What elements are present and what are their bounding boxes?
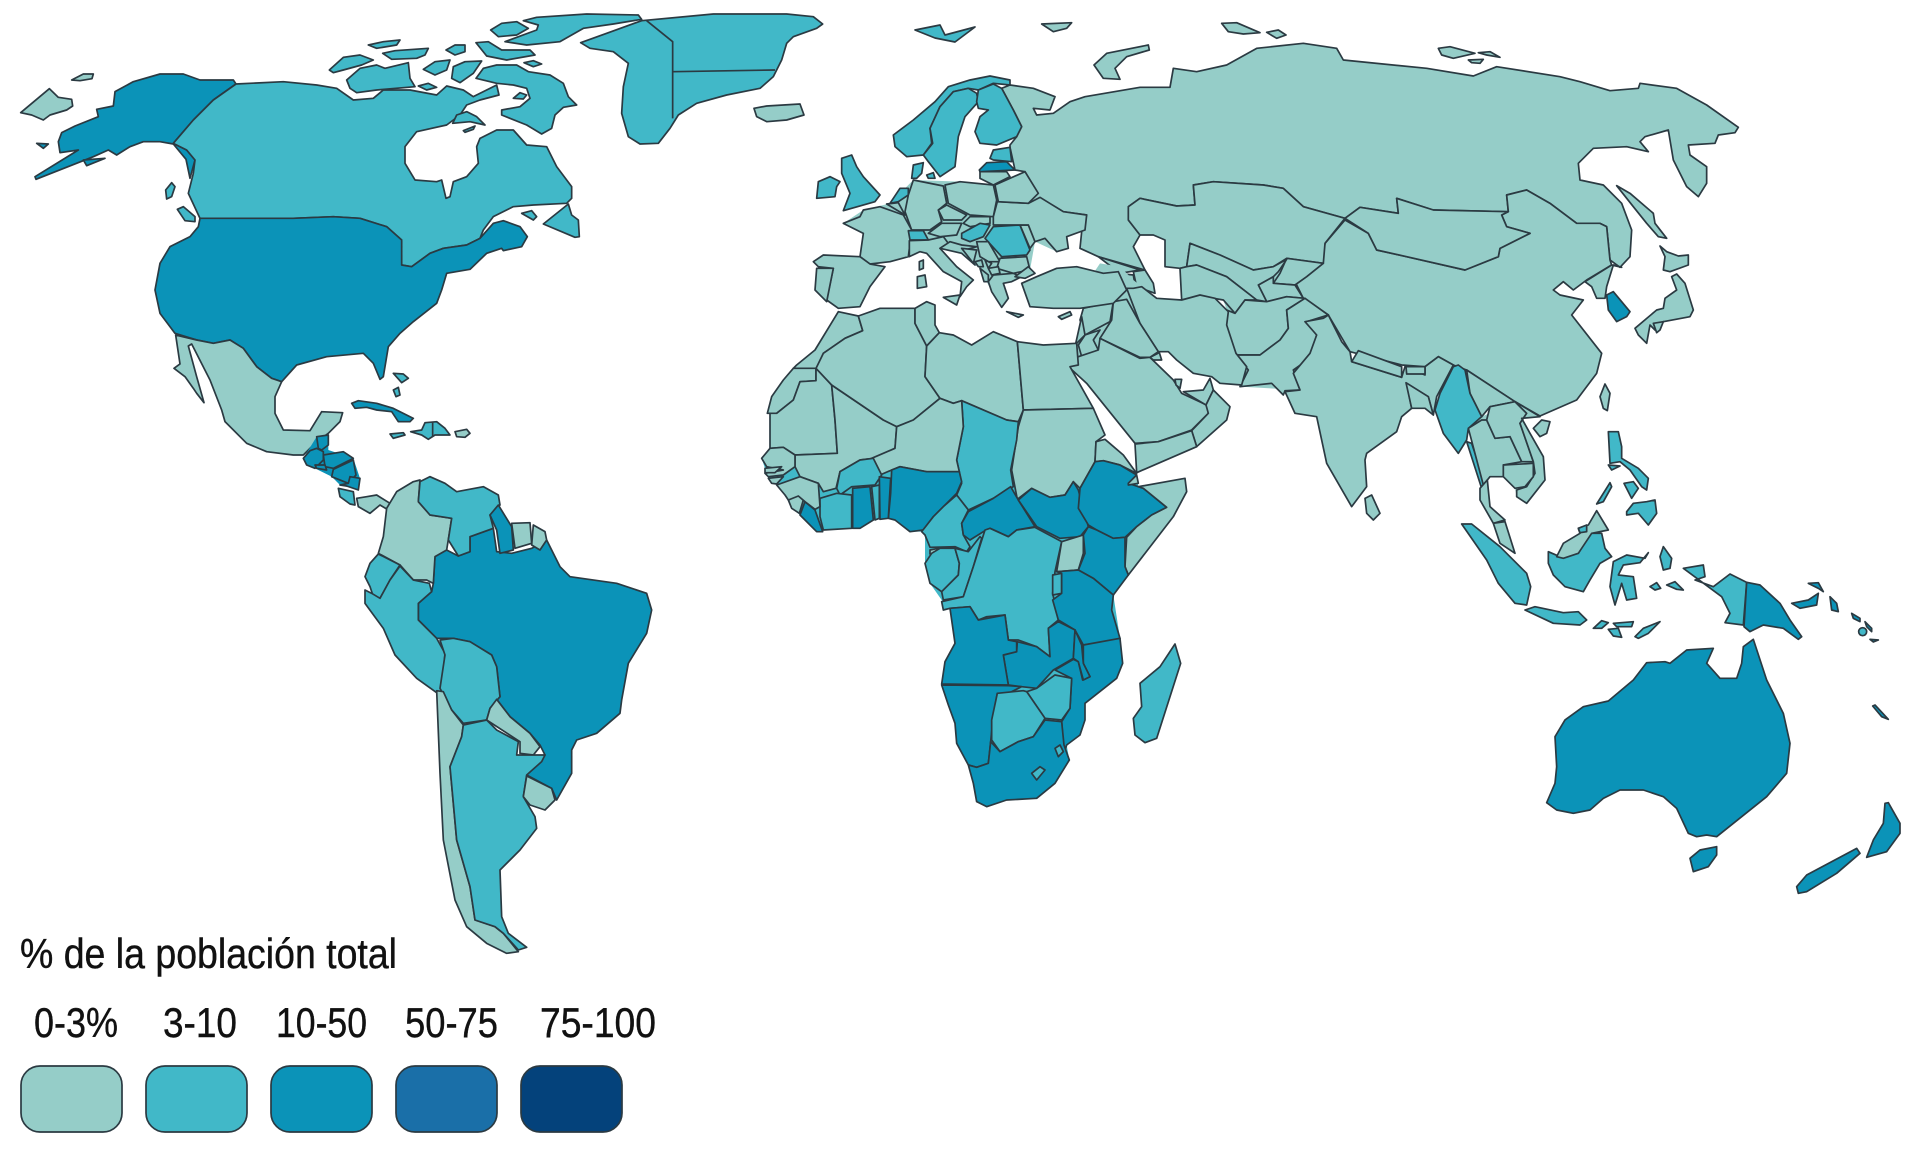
Paraguay bbox=[487, 699, 540, 755]
Germany bbox=[905, 180, 947, 230]
United States bbox=[155, 217, 527, 382]
Myanmar bbox=[1435, 365, 1482, 453]
Poland bbox=[945, 182, 997, 217]
Uruguay bbox=[523, 776, 555, 810]
United Kingdom bbox=[842, 155, 880, 211]
Uganda bbox=[1057, 535, 1083, 572]
Philippines bbox=[1597, 432, 1657, 525]
Romania bbox=[985, 225, 1030, 257]
Chukotka island bbox=[21, 89, 73, 120]
Borneo bbox=[1548, 533, 1612, 592]
Ellesmere Island bbox=[505, 14, 642, 45]
China bbox=[1295, 190, 1612, 416]
Mexico bbox=[174, 335, 343, 455]
region: Arctic Canada and Greenland bbox=[329, 14, 823, 237]
Iraq bbox=[1100, 299, 1158, 357]
Latvia bbox=[979, 162, 1015, 172]
Hungary bbox=[962, 223, 990, 242]
Peru bbox=[365, 566, 445, 693]
Alaska bbox=[35, 74, 236, 179]
Ecuador bbox=[365, 554, 400, 598]
Pakistan bbox=[1237, 298, 1328, 395]
Mozambique bbox=[1055, 638, 1123, 753]
South Korea bbox=[1607, 292, 1630, 322]
Saudi Arabia bbox=[1068, 338, 1208, 443]
Newfoundland bbox=[543, 204, 579, 237]
Russia bbox=[1002, 43, 1738, 270]
Tanzania bbox=[1053, 570, 1120, 645]
Zimbabwe bbox=[1027, 675, 1072, 720]
region: North America bbox=[21, 74, 572, 455]
Botswana bbox=[992, 691, 1045, 752]
Norway bbox=[893, 76, 1010, 157]
Vietnam bbox=[1515, 402, 1545, 503]
Zambia bbox=[1003, 622, 1075, 688]
Democratic Republic of Congo bbox=[942, 527, 1062, 657]
Congo bbox=[942, 537, 982, 600]
Libya bbox=[925, 332, 1023, 422]
Denmark bbox=[912, 163, 923, 178]
Kazakhstan bbox=[1128, 182, 1345, 270]
Ethiopia bbox=[1078, 461, 1167, 538]
region: Caribbean, Central and northern South America bbox=[303, 401, 652, 800]
Sumatra bbox=[1462, 524, 1531, 605]
Svalbard bbox=[915, 25, 975, 42]
legend item: 0-3%: 0-3% bbox=[34, 999, 118, 1046]
Japan bbox=[1635, 246, 1693, 343]
Sudan bbox=[1012, 408, 1105, 499]
Bolivia bbox=[440, 638, 500, 723]
Somalia bbox=[1125, 478, 1187, 575]
Chad bbox=[957, 401, 1018, 510]
Arctic Russian islands bbox=[1042, 23, 1500, 79]
region: Southern Cone bbox=[437, 691, 555, 953]
Iran bbox=[1127, 287, 1247, 385]
region: Korea and Japan bbox=[1585, 186, 1693, 343]
Morocco bbox=[793, 312, 863, 370]
legend item: 10-50 bbox=[271, 999, 372, 1132]
Egypt bbox=[1017, 342, 1093, 410]
region: Australia and New Zealand bbox=[1547, 639, 1900, 893]
Australia bbox=[1547, 639, 1790, 837]
Papua New Guinea bbox=[1744, 582, 1802, 639]
Colombia bbox=[378, 480, 452, 583]
Mongolia bbox=[1345, 198, 1530, 270]
Cuba bbox=[352, 401, 413, 422]
Central African Republic bbox=[962, 487, 1035, 540]
Ivory Coast bbox=[820, 493, 852, 530]
Madagascar bbox=[1133, 644, 1181, 743]
Venezuela bbox=[418, 477, 500, 556]
New Zealand bbox=[1797, 803, 1900, 893]
legend title: % de la población total bbox=[20, 930, 397, 977]
legend item: 75-100: 75-100 bbox=[540, 999, 656, 1046]
Ghana bbox=[853, 487, 873, 528]
legend item: 3-10 bbox=[146, 999, 247, 1132]
Iceland bbox=[754, 104, 804, 122]
Chile bbox=[437, 691, 518, 953]
region: Middle East and South Asia bbox=[1068, 263, 1610, 520]
Syria bbox=[1080, 302, 1113, 335]
Central America bbox=[303, 435, 390, 513]
Niger bbox=[872, 398, 963, 475]
Mali bbox=[795, 385, 897, 492]
France bbox=[843, 207, 912, 264]
Hispaniola bbox=[411, 422, 450, 439]
Burkina Faso bbox=[837, 458, 882, 495]
Angola bbox=[942, 607, 1017, 685]
Cameroon bbox=[922, 495, 970, 552]
Canada bbox=[173, 82, 572, 267]
Tasmania bbox=[1690, 847, 1717, 872]
region: Southeast Asia and Oceania islands bbox=[1462, 432, 1878, 642]
region: Europe and Mediterranean bbox=[813, 76, 1127, 319]
Baffin Island bbox=[476, 65, 577, 134]
Gabon bbox=[925, 548, 959, 592]
Thailand bbox=[1468, 420, 1522, 485]
Argentina bbox=[450, 720, 545, 950]
region: Russia, Central and East Asia bbox=[1002, 23, 1738, 416]
Algeria bbox=[816, 308, 940, 427]
Finland bbox=[975, 84, 1022, 145]
Western Sahara bbox=[767, 368, 816, 413]
legend item: 3-10: 3-10 bbox=[163, 999, 237, 1046]
Ukraine bbox=[993, 197, 1087, 252]
Mauritania bbox=[770, 368, 837, 455]
Indonesian New Guinea bbox=[1683, 565, 1747, 625]
South Sudan bbox=[1018, 482, 1088, 538]
legend item: 75-100 bbox=[521, 999, 656, 1132]
Nigeria bbox=[888, 467, 962, 532]
Balkans bbox=[940, 242, 1030, 307]
Tunisia bbox=[915, 302, 939, 346]
Brazil bbox=[418, 528, 652, 800]
Greenland bbox=[581, 14, 823, 144]
Bahamas bbox=[393, 373, 408, 383]
Ireland bbox=[817, 177, 840, 198]
Malawi bbox=[1073, 630, 1090, 680]
Kenya bbox=[1078, 527, 1128, 595]
Sweden bbox=[923, 88, 978, 177]
Namibia bbox=[942, 685, 1022, 767]
Yemen bbox=[1135, 431, 1197, 473]
legend item: 10-50: 10-50 bbox=[276, 999, 367, 1046]
Sulawesi bbox=[1610, 553, 1648, 605]
Italy bbox=[909, 237, 973, 297]
Spain bbox=[813, 255, 885, 308]
legend bbox=[20, 930, 656, 1132]
legend item: 0-3% bbox=[21, 999, 122, 1132]
South Africa bbox=[968, 720, 1069, 807]
region: Africa bbox=[762, 302, 1187, 807]
Java bbox=[1525, 607, 1587, 625]
India bbox=[1285, 315, 1453, 507]
legend item: 50-75: 50-75 bbox=[405, 999, 498, 1046]
legend item: 50-75 bbox=[396, 999, 498, 1132]
Turkey bbox=[1022, 267, 1127, 308]
